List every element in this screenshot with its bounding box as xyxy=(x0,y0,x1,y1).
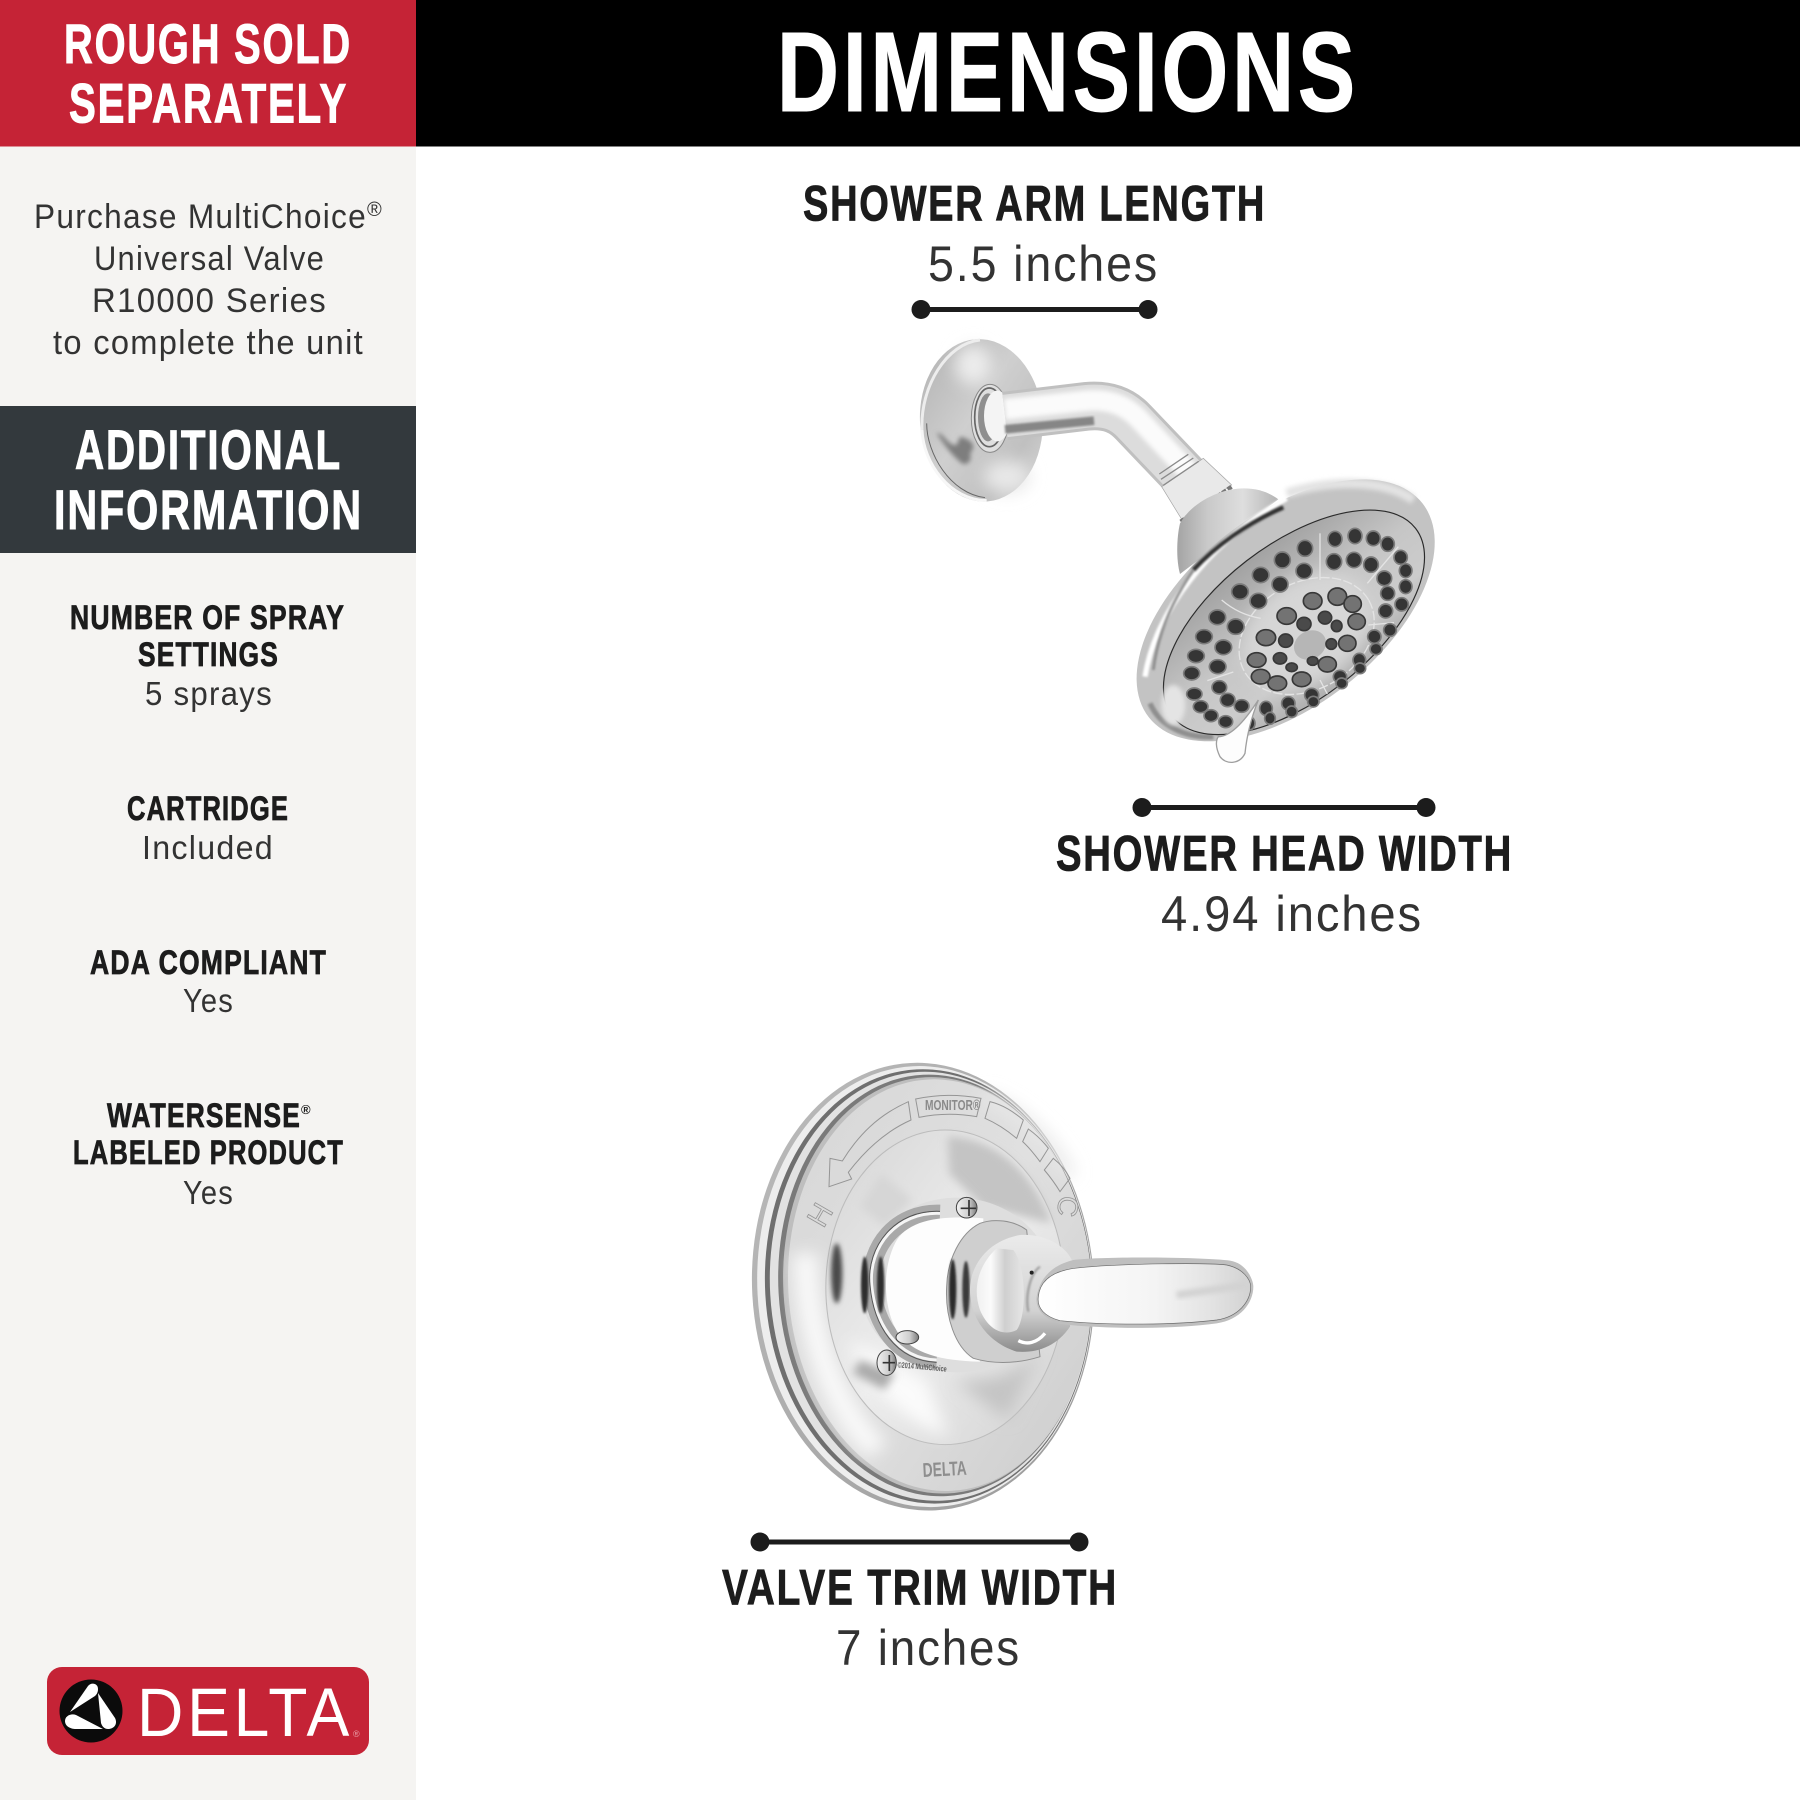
purchase note text: Universal Valve xyxy=(94,240,325,278)
banner: rough sold separately: SEPARATELY xyxy=(69,72,348,134)
pull tab xyxy=(1216,700,1258,762)
sidebar panel xyxy=(0,0,416,1800)
spec: watersense labeled product: WATERSENSE xyxy=(107,1097,301,1135)
plate engraving: ©2014 MultiChoice xyxy=(897,1360,947,1374)
banner: dimensions title: DIMENSIONS xyxy=(777,9,1359,135)
purchase note text: R10000 Series xyxy=(92,282,327,320)
illustration: valve handle xyxy=(860,1197,1253,1375)
white body xyxy=(886,1217,983,1362)
purchase note text: Purchase MultiChoice xyxy=(34,198,367,236)
dimension line: arm xyxy=(912,300,1158,319)
spec: ada compliant: ADA COMPLIANT xyxy=(90,944,327,982)
handle hub xyxy=(970,1235,1073,1352)
banner: rough sold separately: ROUGH SOLD xyxy=(64,12,352,75)
spec: number of spray settings: SETTINGS xyxy=(138,636,279,674)
flange xyxy=(914,335,1048,506)
heading: additional information xyxy=(0,406,416,553)
callout: valve trim width: VALVE TRIM WIDTH xyxy=(722,1560,1118,1616)
dial segments xyxy=(829,1095,1070,1192)
dial label: H: H xyxy=(801,1197,841,1232)
spec: watersense labeled product: Yes xyxy=(183,1174,234,1211)
spray nozzles xyxy=(1184,528,1412,730)
illustration: shower head xyxy=(1090,428,1482,793)
spec: ada compliant xyxy=(90,944,327,1019)
banner: rough sold separately xyxy=(0,0,416,146)
illustration: shower arm and flange xyxy=(914,335,1232,522)
purchase note text: to complete the unit xyxy=(53,324,364,362)
arm nut xyxy=(971,384,1011,452)
heading: additional information: ADDITIONAL xyxy=(75,418,342,481)
shower arm xyxy=(1005,400,1190,478)
spec: cartridge: CARTRIDGE xyxy=(127,790,289,828)
callout: shower head width: 4.94 inches xyxy=(1161,886,1423,942)
spec: number of spray settings xyxy=(70,599,345,712)
spec: cartridge: Included xyxy=(142,829,274,866)
dimension line: head xyxy=(1132,798,1436,817)
logo: delta xyxy=(47,1667,369,1755)
callout: shower arm length: SHOWER ARM LENGTH xyxy=(803,176,1266,232)
callout: shower arm length xyxy=(803,176,1266,319)
spec: ada compliant: Yes xyxy=(183,982,234,1019)
banner: dimensions title xyxy=(416,0,1800,146)
heading: additional information: INFORMATION xyxy=(54,478,363,541)
callout: valve trim width xyxy=(722,1532,1118,1676)
spec: number of spray settings: NUMBER OF SPRAY xyxy=(70,599,345,637)
spec: watersense labeled product xyxy=(73,1097,344,1211)
dimension line: valve xyxy=(750,1532,1088,1552)
valve dial markings xyxy=(801,1095,1085,1232)
swivel collar xyxy=(1159,454,1232,522)
purchase note text xyxy=(34,198,383,362)
callout: shower head width xyxy=(1056,798,1513,942)
dial label: C: C xyxy=(1049,1193,1085,1220)
screws xyxy=(877,1197,977,1375)
lever handle xyxy=(1036,1258,1253,1328)
callout: shower arm length: 5.5 inches xyxy=(928,236,1159,292)
plate label: delta: DELTA xyxy=(922,1458,967,1482)
ball joint xyxy=(1177,488,1278,574)
face spokes xyxy=(1207,533,1398,718)
front collar xyxy=(946,1221,1040,1362)
dial label: monitor: MONITOR® xyxy=(925,1098,980,1114)
callout: valve trim width: 7 inches xyxy=(836,1620,1021,1676)
purchase note text: ® xyxy=(367,199,383,221)
head rim xyxy=(1090,428,1482,793)
logo: delta: DELTA xyxy=(137,1674,353,1751)
spec: number of spray settings: 5 sprays xyxy=(145,675,273,712)
center nozzles xyxy=(1247,588,1365,691)
plate highlights xyxy=(805,1097,1069,1450)
spec: watersense labeled product: LABELED PRODUCT xyxy=(73,1134,344,1172)
spec: cartridge xyxy=(127,790,289,866)
logo: delta: ® xyxy=(353,1729,360,1739)
spec: watersense labeled product: ® xyxy=(301,1102,311,1117)
trim plate xyxy=(740,1054,1106,1519)
center disc xyxy=(1289,625,1331,665)
illustration: valve trim plate xyxy=(740,1054,1106,1519)
callout: shower head width: SHOWER HEAD WIDTH xyxy=(1056,826,1513,882)
base disc xyxy=(860,1198,1053,1372)
dial recess xyxy=(826,1130,1065,1445)
